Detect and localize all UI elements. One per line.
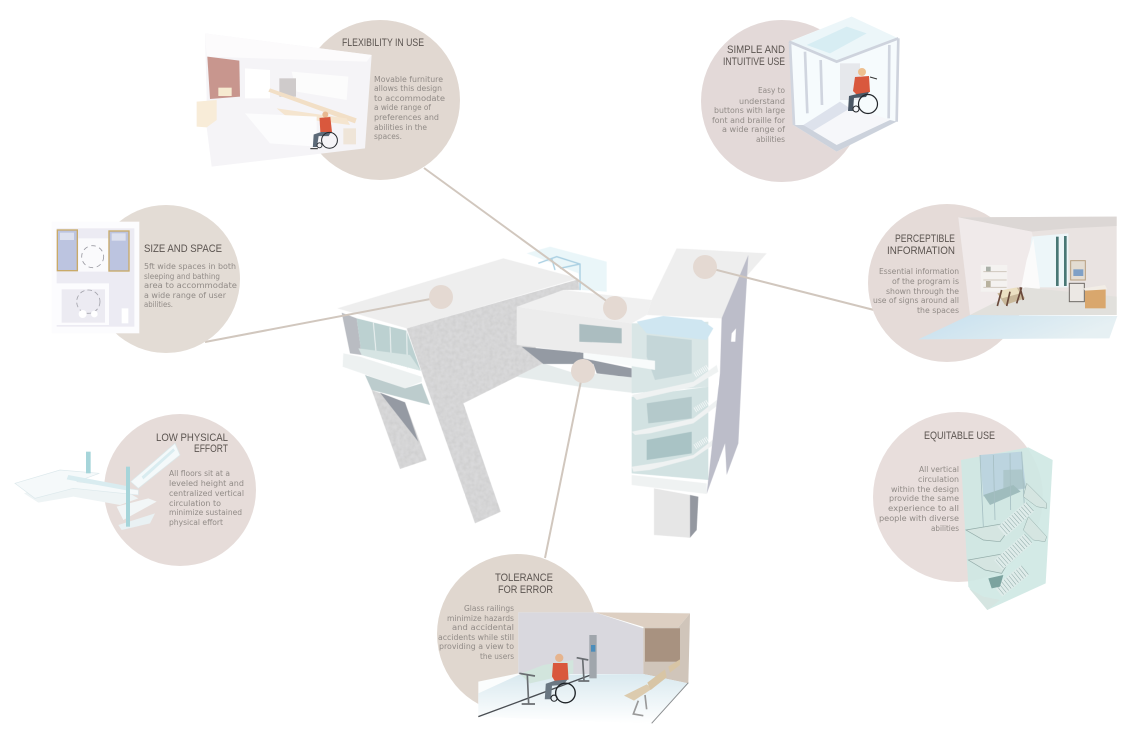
- description: people with diverse: [879, 514, 959, 523]
- description: minimize hazards: [447, 614, 514, 623]
- left block lower glazing: [365, 375, 430, 405]
- circle background: [868, 204, 1026, 362]
- connector line: flexibility: [424, 168, 612, 305]
- description: abilities in the: [374, 123, 427, 132]
- stair shaft illustration: [961, 447, 1053, 610]
- description: allows this design: [374, 84, 442, 93]
- marker dot: size and space: [429, 285, 453, 309]
- circle background: [437, 554, 597, 714]
- right tower side wall: [707, 255, 748, 494]
- left block balcony slab: [343, 353, 422, 388]
- description: [879, 465, 959, 533]
- central building model: [337, 247, 767, 538]
- description: providing a view to: [439, 642, 514, 651]
- marker dot: perceptible: [693, 255, 717, 279]
- right tower roof: [647, 248, 767, 318]
- description: shown through the: [886, 287, 959, 296]
- heading: SIZE AND SPACE: [144, 243, 222, 255]
- heading: TOLERANCE: [495, 572, 553, 584]
- description: font and braille for: [712, 116, 786, 125]
- circle background: [92, 205, 240, 353]
- heading: [723, 44, 785, 68]
- description: and accidental: [452, 623, 514, 632]
- rooftop glass lift: [527, 247, 607, 292]
- description: within the design: [891, 485, 959, 494]
- heading: EFFORT: [194, 443, 228, 455]
- pedestal: [654, 488, 698, 538]
- description: Essential information: [879, 267, 959, 276]
- marker dot: flexibility: [603, 296, 627, 320]
- panel: size and space: [52, 205, 240, 353]
- description: circulation to: [169, 499, 221, 508]
- description: abilities: [756, 135, 785, 144]
- description: abilities: [931, 524, 959, 533]
- description: understand: [739, 97, 785, 106]
- left leg: [372, 390, 427, 469]
- white balcony strip: [583, 353, 655, 370]
- description: to accommodate: [374, 94, 445, 103]
- heading: [887, 233, 955, 257]
- circle background: [873, 412, 1043, 582]
- description: Movable furniture: [374, 75, 443, 84]
- right tower stair shaft: [632, 365, 718, 480]
- description: Glass railings: [464, 604, 514, 613]
- description: of the program is: [892, 277, 959, 286]
- description: [438, 604, 514, 661]
- heading: LOW PHYSICAL: [156, 432, 228, 444]
- description: centralized vertical: [169, 489, 244, 498]
- centre block top: [517, 290, 652, 323]
- panel: simple and intuitive use: [701, 17, 898, 182]
- tower base slab: [632, 475, 707, 494]
- description: experience to all: [888, 504, 959, 513]
- centre block front: [517, 307, 632, 358]
- description: abilities.: [144, 300, 173, 309]
- centre block underside: [522, 347, 632, 377]
- left block upper glazing: [342, 313, 421, 371]
- description: [144, 262, 237, 309]
- heading: EQUITABLE USE: [924, 430, 995, 442]
- heading: PERCEPTIBLE: [895, 233, 955, 245]
- description: the spaces: [917, 306, 959, 315]
- centre block window: [579, 324, 622, 343]
- description: accidents while still: [438, 633, 514, 642]
- lift illustration: [789, 17, 898, 152]
- description: [169, 469, 244, 527]
- panel: equitable use: [873, 412, 1053, 610]
- description: [374, 75, 445, 141]
- connector line: size and space: [205, 297, 441, 342]
- description: a wide range of user: [144, 291, 227, 300]
- description: a wide range of: [374, 103, 431, 112]
- description: sleeping and bathing: [144, 272, 220, 281]
- description: a wide range of: [722, 125, 785, 134]
- panel: flexibility in use: [197, 20, 460, 180]
- heading: SIMPLE AND: [727, 44, 785, 56]
- connector line: perceptible information: [705, 267, 878, 311]
- circle background: [701, 20, 863, 182]
- panel: low physical effort: [15, 414, 256, 566]
- floor plan illustration: [52, 222, 139, 333]
- description: Easy to: [758, 86, 785, 95]
- description: All floors sit at a: [169, 469, 230, 478]
- description: use of signs around all: [873, 296, 959, 305]
- description: [873, 267, 959, 315]
- heading: [156, 432, 228, 455]
- marker dot: tolerance: [571, 359, 595, 383]
- connector line: tolerance for error: [545, 371, 583, 558]
- kitchen illustration: [197, 33, 372, 167]
- wheelchair user: [545, 654, 575, 703]
- description: All vertical: [919, 465, 959, 474]
- description: physical effort: [169, 518, 223, 527]
- centre block lower slab: [517, 363, 655, 393]
- description: leveled height and: [169, 479, 244, 488]
- right tower glazed top: [632, 322, 708, 393]
- description: [712, 86, 786, 144]
- heading: FOR ERROR: [498, 584, 553, 596]
- circle background: [104, 414, 256, 566]
- heading: [495, 572, 553, 596]
- hall illustration: [478, 612, 690, 723]
- description: circulation: [918, 475, 959, 484]
- description: preferences and: [374, 113, 439, 122]
- description: buttons with large: [714, 106, 785, 115]
- description: provide the same: [889, 494, 959, 503]
- heading: FLEXIBILITY IN USE: [342, 37, 424, 49]
- floor plates illustration: [15, 443, 180, 530]
- heading: INTUITIVE USE: [723, 56, 785, 68]
- room illustration: [918, 217, 1117, 339]
- description: minimize sustained: [169, 508, 242, 517]
- description: the users: [480, 652, 514, 661]
- panel: perceptible information: [868, 204, 1117, 362]
- blue lift head: [637, 316, 713, 340]
- left block roof: [337, 258, 578, 328]
- description: spaces.: [374, 132, 402, 141]
- wheelchair user: [310, 111, 337, 149]
- circle background: [300, 20, 460, 180]
- description: 5ft wide spaces in both: [144, 262, 236, 271]
- left block brick wall and leg: [407, 279, 579, 523]
- heading: INFORMATION: [887, 245, 955, 257]
- wheelchair user: [848, 68, 877, 113]
- panel: tolerance for error: [437, 554, 690, 723]
- description: area to accommodate: [144, 281, 237, 290]
